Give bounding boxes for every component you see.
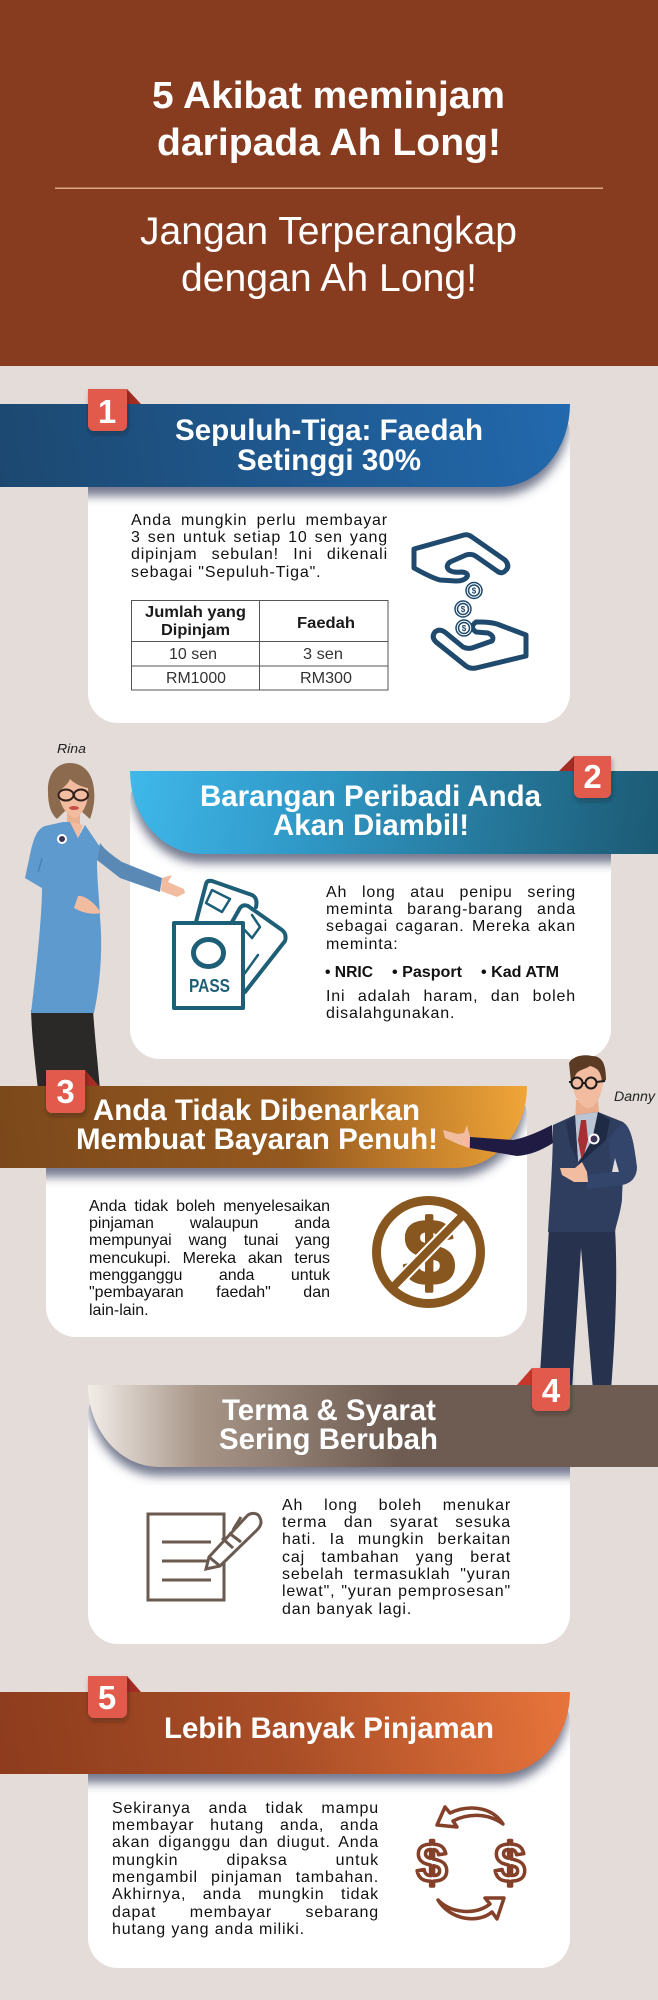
number badge 5 — [88, 1676, 141, 1718]
icon: money cycle — [416, 1807, 526, 1919]
icon: passport and cards — [174, 881, 286, 1008]
body text 1: Anda mungkin perlu membayar — [131, 512, 388, 529]
banner 4 — [88, 1385, 658, 1467]
interest table — [132, 600, 388, 690]
subtitle: dengan Ah Long! — [181, 257, 477, 300]
interest table: RM300 — [300, 670, 352, 687]
body text 4: sebelah termasuklah "yuran — [282, 1566, 511, 1583]
number badge 2: 2 — [583, 758, 602, 795]
body text 4: Ah long boleh menukar — [282, 1497, 511, 1514]
body text 1: dipinjam sebulan! Ini dikenali — [131, 546, 388, 563]
body text 5: membayar hutang anda, anda — [112, 1817, 379, 1834]
interest table: RM1000 — [166, 670, 226, 687]
banner 3 — [0, 1086, 527, 1168]
body text 2 — [326, 884, 580, 956]
body text 5: dapat membayar sebarang — [112, 1904, 379, 1921]
heading 2: Akan Diambil! — [273, 809, 469, 842]
requested items list: • Kad ATM — [481, 964, 559, 981]
body text 5: hutang yang anda miliki. — [112, 1921, 305, 1938]
body text 4: dan banyak lagi. — [282, 1601, 412, 1618]
body text 2: meminta barang-barang anda — [326, 901, 576, 918]
subtitle — [140, 210, 517, 300]
label: Rina: Rina — [57, 741, 86, 756]
body text 4 — [282, 1497, 515, 1623]
body text 5 — [112, 1800, 383, 1942]
heading 3: Membuat Bayaran Penuh! — [76, 1123, 438, 1156]
body text 4: lewat", "yuran pemprosesan" — [282, 1583, 511, 1600]
body text 1: 3 sen untuk setiap 10 sen yang — [131, 529, 388, 546]
panel 5: Lebih Banyak Pinjaman — [0, 1676, 570, 1968]
heading 3: Anda Tidak Dibenarkan — [93, 1094, 420, 1127]
icon: hands and coins: $ — [472, 586, 477, 596]
body text 3: mencukupi. Mereka akan terus — [89, 1250, 330, 1267]
body text 3: pinjaman walaupun anda — [89, 1215, 330, 1232]
heading 4: Terma & Syarat — [222, 1394, 436, 1427]
body text 3: lain-lain. — [89, 1302, 149, 1319]
icon: money cycle: $ — [494, 1831, 526, 1894]
body text 5: Sekiranya anda tidak mampu — [112, 1800, 379, 1817]
icon: no dollar sign — [376, 1200, 480, 1304]
heading 5: Lebih Banyak Pinjaman — [164, 1712, 494, 1745]
panel 4: Terma & Syarat — [88, 1368, 658, 1644]
label: Danny: Danny — [614, 1089, 656, 1104]
title: daripada Ah Long! — [157, 122, 501, 164]
heading 1: Setinggi 30% — [237, 444, 421, 477]
heading 4 — [219, 1394, 438, 1456]
heading 1 — [175, 414, 483, 477]
body text 3: mempunyai wang tunai yang — [89, 1232, 330, 1249]
body text 2: meminta: — [326, 936, 399, 953]
heading 2: Barangan Peribadi Anda — [200, 780, 542, 813]
heading 4: Sering Berubah — [219, 1423, 438, 1456]
character: Danny — [443, 1055, 637, 1390]
body text 5: mungkin dipaksa untuk — [112, 1852, 379, 1869]
icon: no dollar sign: $ — [403, 1202, 455, 1304]
number badge 3 — [46, 1070, 99, 1113]
body text 5: mengambil pinjaman tambahan. — [112, 1869, 379, 1886]
body text 3: "pembayaran faedah" dan — [89, 1284, 330, 1301]
closing text 2: Ini adalah haram, dan boleh — [326, 988, 576, 1005]
banner 2 — [130, 771, 658, 854]
body text 3 — [89, 1198, 334, 1324]
title: 5 Akibat meminjam — [152, 75, 505, 117]
heading 2 — [200, 780, 542, 842]
body text 4: terma dan syarat sesuka — [282, 1514, 511, 1531]
body text 4: caj tambahan yang berat — [282, 1549, 511, 1566]
body text 5: akan diganggu dan diugut. Anda — [112, 1834, 379, 1851]
character: Rina — [25, 763, 185, 1090]
interest table: 10 sen — [169, 646, 217, 663]
closing text 2 — [326, 988, 580, 1026]
icon: hands and coins: $ — [461, 605, 466, 614]
number badge 2 — [559, 756, 611, 798]
icon: money cycle: $ — [416, 1831, 448, 1894]
icon: passport and cards: PASS — [189, 976, 230, 996]
panel 1: Sepuluh-Tiga — [0, 389, 570, 723]
body text 2: sebagai cagaran. Mereka akan — [326, 918, 576, 935]
banner 5 — [0, 1692, 570, 1774]
icon: document and pen — [148, 1513, 261, 1600]
number badge 3: 3 — [56, 1073, 75, 1110]
interest table: Jumlah yang — [145, 604, 246, 621]
number badge 4 — [517, 1368, 570, 1411]
body text 2: Ah long atau penipu sering — [326, 884, 576, 901]
requested items list: • NRIC — [325, 964, 373, 981]
body text 1 — [131, 512, 391, 584]
number badge 5: 5 — [98, 1679, 116, 1716]
heading 1: Sepuluh-Tiga: Faedah — [175, 414, 483, 447]
requested items list: • Pasport — [392, 964, 463, 981]
number badge 1 — [88, 389, 141, 431]
title — [152, 75, 505, 164]
icon: hands and coins — [414, 535, 526, 668]
body text 5: Akhirnya, anda mungkin tidak — [112, 1886, 379, 1903]
interest table: Dipinjam — [161, 622, 230, 639]
panel 2: Barangan Peribadi — [130, 756, 658, 1059]
heading 3 — [76, 1094, 438, 1156]
icon: hands and coins: $ — [462, 624, 467, 633]
banner 1 — [0, 404, 570, 487]
number badge 4: 4 — [542, 1372, 561, 1409]
panel 3: Bayaran Penuh — [0, 1070, 527, 1337]
body text 4: hati. Ia mungkin berkaitan — [282, 1531, 511, 1548]
interest table: 3 sen — [303, 646, 343, 663]
body text 1: sebagai "Sepuluh-Tiga". — [131, 564, 321, 581]
requested items list — [325, 964, 559, 981]
closing text 2: disalahgunakan. — [326, 1005, 455, 1022]
interest table: Faedah — [297, 615, 355, 632]
subtitle: Jangan Terperangkap — [140, 210, 517, 253]
body text 3: mengganggu anda untuk — [89, 1267, 330, 1284]
body text 3: Anda tidak boleh menyelesaikan — [89, 1198, 330, 1215]
number badge 1: 1 — [98, 393, 116, 430]
header panel — [0, 0, 658, 366]
